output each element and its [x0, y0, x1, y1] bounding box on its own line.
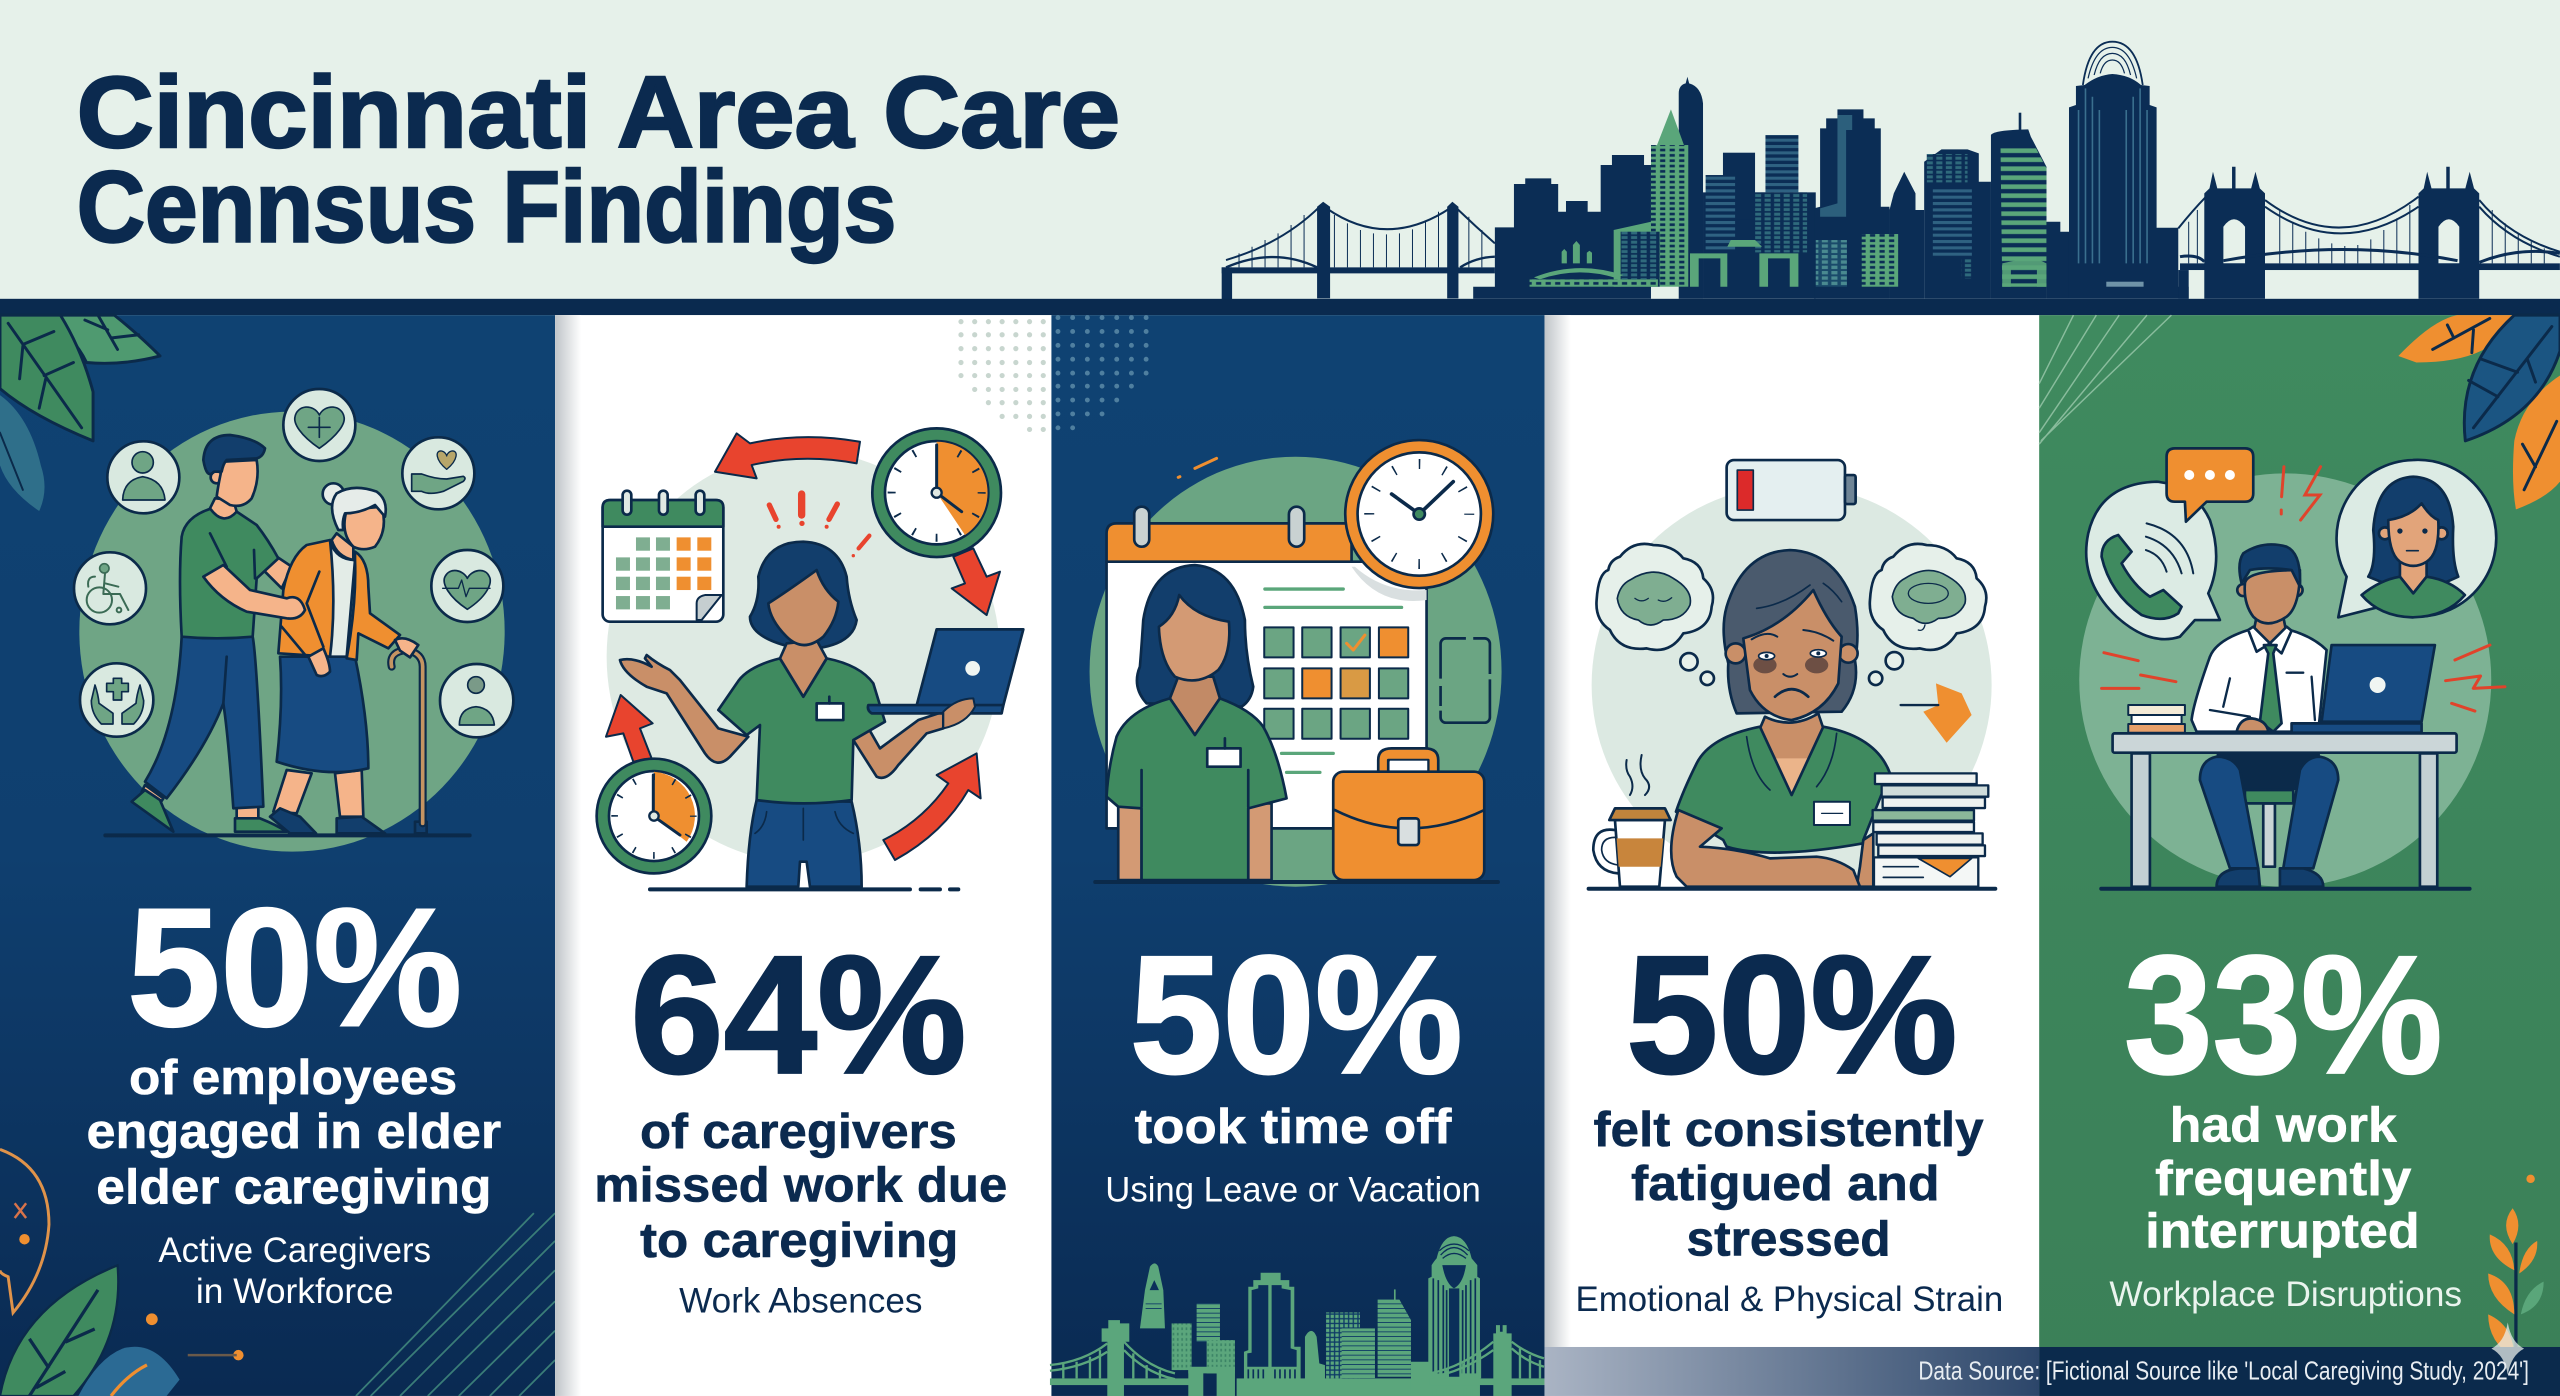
coffee cup	[1593, 755, 1671, 887]
header background	[0, 0, 2560, 300]
ground line	[2099, 887, 2472, 891]
low battery icon	[1727, 460, 1856, 520]
time off illustration	[1090, 440, 1502, 887]
leaves top right	[2398, 315, 2560, 509]
icon: elder with helper	[440, 664, 513, 737]
panel 3: using leave	[1050, 315, 1545, 1396]
thought cloud left	[1596, 544, 1714, 685]
description: stressed	[1687, 1213, 1891, 1267]
description: fatigued and	[1631, 1157, 1940, 1211]
description: of employees	[129, 1051, 457, 1105]
ground line	[1093, 880, 1500, 884]
fatigued worker illustration	[1587, 460, 1997, 891]
pale circle backdrop	[1592, 485, 1992, 885]
colleague speech bubble	[2337, 460, 2496, 617]
book stack	[1873, 773, 1988, 887]
right bridge	[1430, 1325, 1545, 1396]
plant sprig	[2488, 1175, 2544, 1358]
light green circle backdrop	[2079, 473, 2491, 887]
man at desk	[2192, 544, 2338, 887]
sparkle	[2491, 1322, 2524, 1375]
green city skyline	[1050, 1236, 1545, 1396]
description: felt consistently	[1593, 1103, 1984, 1157]
panel 5: workplace disruptions	[2039, 315, 2560, 1396]
icon: heart pulse	[431, 550, 503, 622]
title: Cincinnati Area Care	[77, 56, 1120, 169]
sub-label: Emotional & Physical Strain	[1576, 1280, 2003, 1319]
elderly woman with cane	[270, 483, 427, 833]
description: took time off	[1135, 1100, 1452, 1154]
pale circle backdrop	[607, 451, 1000, 863]
icon: heart with plus	[283, 389, 355, 461]
ground line	[103, 833, 472, 837]
stat 64%: 64%	[630, 921, 967, 1109]
exclamation marks	[769, 494, 869, 557]
stat 50%: 50%	[127, 873, 462, 1061]
icon: wheelchair	[74, 552, 146, 624]
decorative leaves top left	[0, 315, 160, 511]
title: Cennsus Findings	[77, 151, 896, 264]
left bridge	[1222, 202, 1495, 299]
dot pattern	[961, 322, 1048, 429]
arrows around the worker	[606, 433, 1000, 860]
calendar page	[1107, 507, 1490, 828]
icon: person	[107, 441, 179, 513]
towers right of centre	[1237, 1289, 1430, 1396]
description	[87, 1051, 501, 1214]
desk	[2113, 733, 2457, 887]
man caregiver body	[132, 435, 292, 832]
panel 3 background	[1051, 315, 1544, 1396]
right bridge	[2178, 167, 2560, 299]
down arrow	[1901, 683, 1972, 743]
green circle backdrop	[79, 412, 505, 852]
footer fade over panel 4	[1544, 1347, 2039, 1396]
man's hand on her arm	[203, 565, 305, 619]
city towers silhouette	[1473, 42, 2189, 299]
panel 4 background	[1544, 315, 2039, 1396]
phone speech bubble	[2086, 482, 2220, 639]
sub-label: in Workforce	[196, 1272, 393, 1311]
stat 50%: 50%	[1130, 921, 1463, 1109]
description: had work	[2170, 1098, 2398, 1152]
stat 33%: 33%	[2124, 921, 2442, 1109]
description	[2145, 1098, 2420, 1258]
lightning marks top	[2281, 467, 2321, 520]
caregiver illustration	[74, 389, 513, 852]
sub-label: Active Caregivers	[158, 1231, 431, 1270]
wall clock	[1345, 440, 1493, 588]
clock bottom left	[597, 759, 711, 873]
overwhelmed worker illustration	[597, 428, 1023, 889]
ground line	[1587, 887, 1997, 891]
panel 4 edge shadow	[1544, 315, 1571, 1396]
description: missed work due	[594, 1159, 1007, 1213]
green circle backdrop	[1090, 457, 1502, 887]
calendar	[603, 491, 723, 622]
header navy band	[0, 299, 2560, 315]
description	[1593, 1103, 1984, 1267]
sub-label	[158, 1231, 431, 1311]
left bridge	[1050, 1320, 1197, 1396]
panel 4: emotional and physical strain	[1544, 315, 2039, 1396]
panel 2 background	[555, 315, 1051, 1396]
worker arms	[620, 655, 943, 778]
laptop	[2292, 645, 2435, 733]
worker figure	[718, 542, 885, 887]
dot pattern	[1058, 318, 1148, 428]
header skyline with bridges	[1222, 42, 2560, 299]
stat 50%: 50%	[1626, 921, 1958, 1109]
description: of caregivers	[640, 1105, 957, 1159]
towers left of centre	[1140, 1263, 1235, 1396]
description: frequently	[2155, 1152, 2411, 1206]
orange chat bubble	[2167, 448, 2253, 522]
description: elder caregiving	[96, 1160, 491, 1214]
sub-label: Work Absences	[679, 1282, 922, 1321]
description: interrupted	[2145, 1204, 2420, 1258]
description	[594, 1105, 1007, 1268]
panel 2: work absences	[555, 315, 1051, 1396]
tired woman	[1671, 550, 1890, 887]
book pile	[2128, 705, 2185, 733]
panel 1: active caregivers	[0, 315, 555, 1396]
clock top right	[872, 428, 1001, 557]
footer source strip	[1544, 1322, 2560, 1396]
decorative corner: leaves and lines bottom left	[0, 1149, 555, 1396]
sub-label: Using Leave or Vacation	[1105, 1171, 1481, 1210]
briefcase	[1333, 748, 1484, 880]
interrupted worker illustration	[2079, 448, 2505, 891]
crown tower	[1428, 1236, 1480, 1396]
icon: hands with cross	[80, 663, 153, 737]
stepped central tower	[1244, 1273, 1301, 1396]
panel 5 background	[2039, 315, 2560, 1396]
description: engaged in elder	[87, 1105, 501, 1159]
title	[77, 56, 1120, 264]
disruption marks	[2102, 645, 2505, 711]
description: to caregiving	[640, 1214, 958, 1268]
sub-label: Workplace Disruptions	[2109, 1275, 2462, 1314]
ground line	[650, 883, 958, 895]
panel 2 edge shadow	[555, 315, 581, 1396]
footer navy over panel 5	[2039, 1347, 2560, 1396]
icon: caring hand	[402, 437, 474, 509]
panel 1 background	[0, 315, 555, 1396]
diagonal lines	[2039, 315, 2171, 444]
woman figure	[1107, 565, 1287, 880]
small orange marks	[1178, 458, 1217, 477]
thought cloud right	[1869, 544, 1986, 685]
green accents in the skyline	[1530, 109, 2046, 287]
laptop on hand	[868, 629, 1023, 728]
